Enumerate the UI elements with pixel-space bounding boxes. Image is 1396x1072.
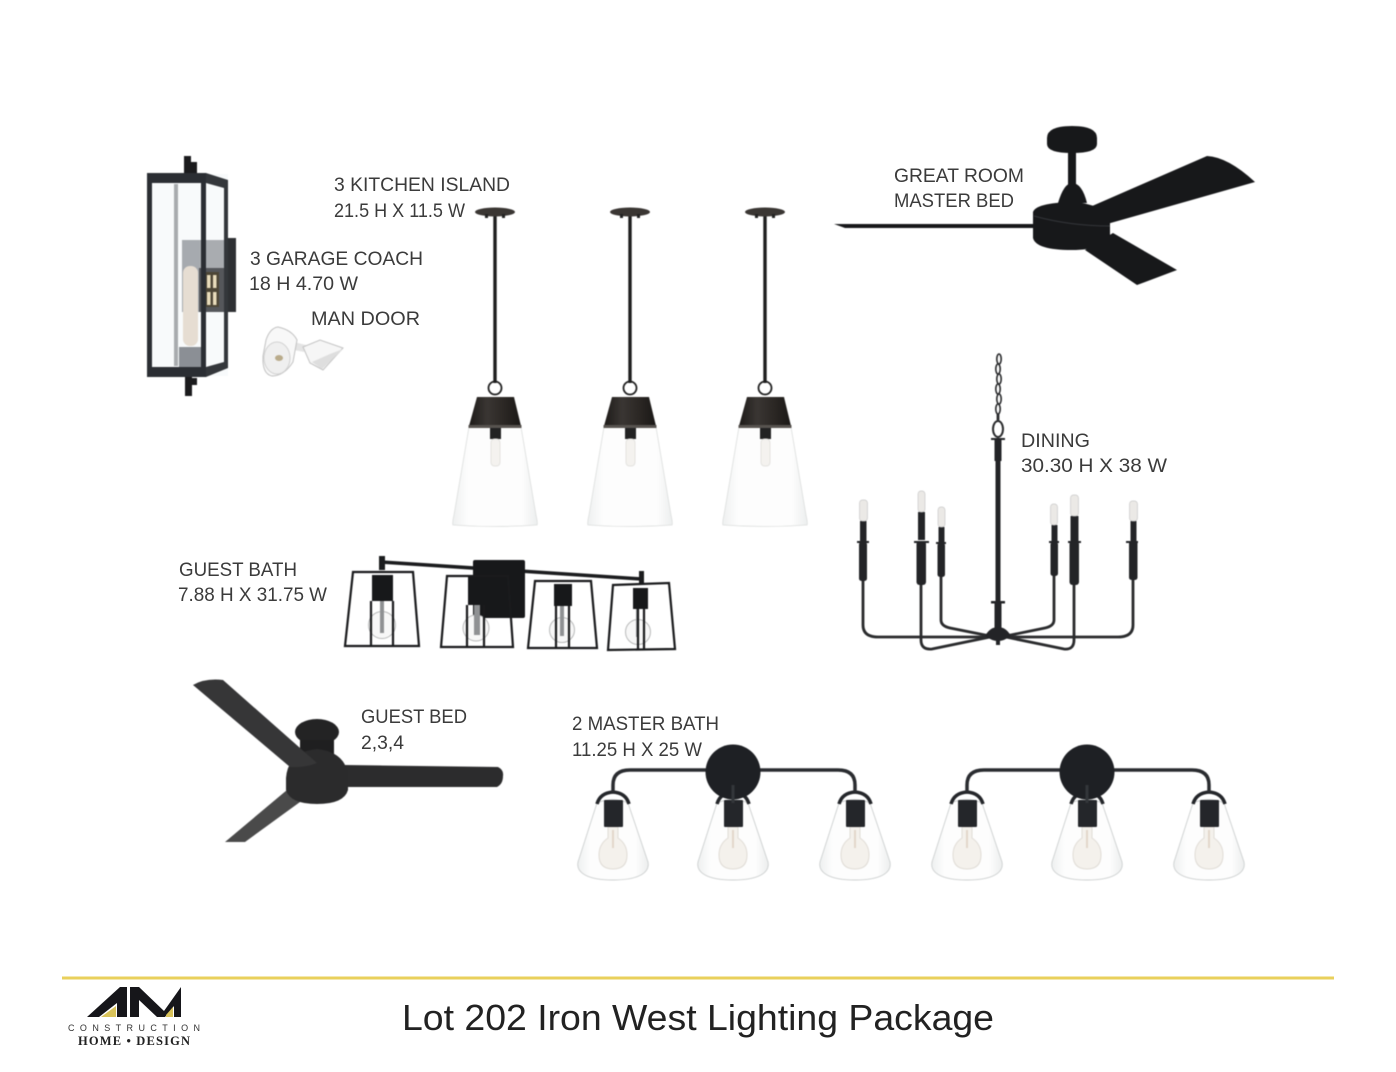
footer rule: [62, 976, 1334, 980]
label: guest bed: GUEST BED: [361, 707, 467, 728]
icon: kitchen island pendant 3: [723, 208, 807, 526]
label: dining: DINING: [1021, 431, 1090, 452]
label: master bath: 2 MASTER BATH: [572, 714, 719, 735]
logo: AM Construction Home Design: HOME • DESIGN: [78, 1034, 190, 1048]
label: great room / master bed: [894, 166, 1024, 212]
label: great room / master bed: MASTER BED: [894, 191, 1014, 212]
label: garage coach: 3 GARAGE COACH: [250, 249, 423, 270]
label: dining: 30.30 H X 38 W: [1021, 456, 1167, 477]
icon: kitchen island pendant 2: [588, 208, 672, 526]
label: great room / master bed: GREAT ROOM: [894, 166, 1024, 187]
logo: AM Construction Home Design: [68, 987, 200, 1048]
icon: kitchen island pendant 1: [453, 208, 537, 526]
label: master bath: 11.25 H X 25 W: [572, 740, 702, 761]
label: man door: MAN DOOR: [311, 309, 420, 330]
icon: man door flood light: [263, 327, 343, 376]
label: kitchen island: 3 KITCHEN ISLAND: [334, 175, 510, 196]
icon: master bath vanity light 2: [932, 744, 1244, 880]
label: garage coach: 18 H 4.70 W: [249, 274, 358, 295]
label: master bath: [572, 714, 719, 761]
icon: master bath vanity light 1: [578, 744, 890, 880]
icon: dining chandelier: [857, 354, 1138, 649]
icon: guest bed ceiling fan: [193, 680, 503, 842]
logo: AM Construction Home Design: CONSTRUCTION: [68, 1023, 200, 1033]
label: guest bed: [361, 707, 467, 754]
title: Lot 202 Iron West Lighting Package: [402, 997, 994, 1038]
icon: guest bath vanity light: [345, 556, 675, 650]
label: dining: [1021, 431, 1167, 477]
label: garage coach: [249, 249, 423, 295]
label: guest bed: 2,3,4: [361, 733, 404, 754]
icon: garage coach lantern: [147, 156, 236, 396]
label: guest bath: GUEST BATH: [179, 560, 297, 581]
icon: great room ceiling fan: [834, 126, 1255, 285]
label: guest bath: [178, 560, 327, 606]
label: kitchen island: [334, 175, 510, 222]
label: kitchen island: 21.5 H X 11.5 W: [334, 201, 465, 222]
label: guest bath: 7.88 H X 31.75 W: [178, 585, 327, 606]
